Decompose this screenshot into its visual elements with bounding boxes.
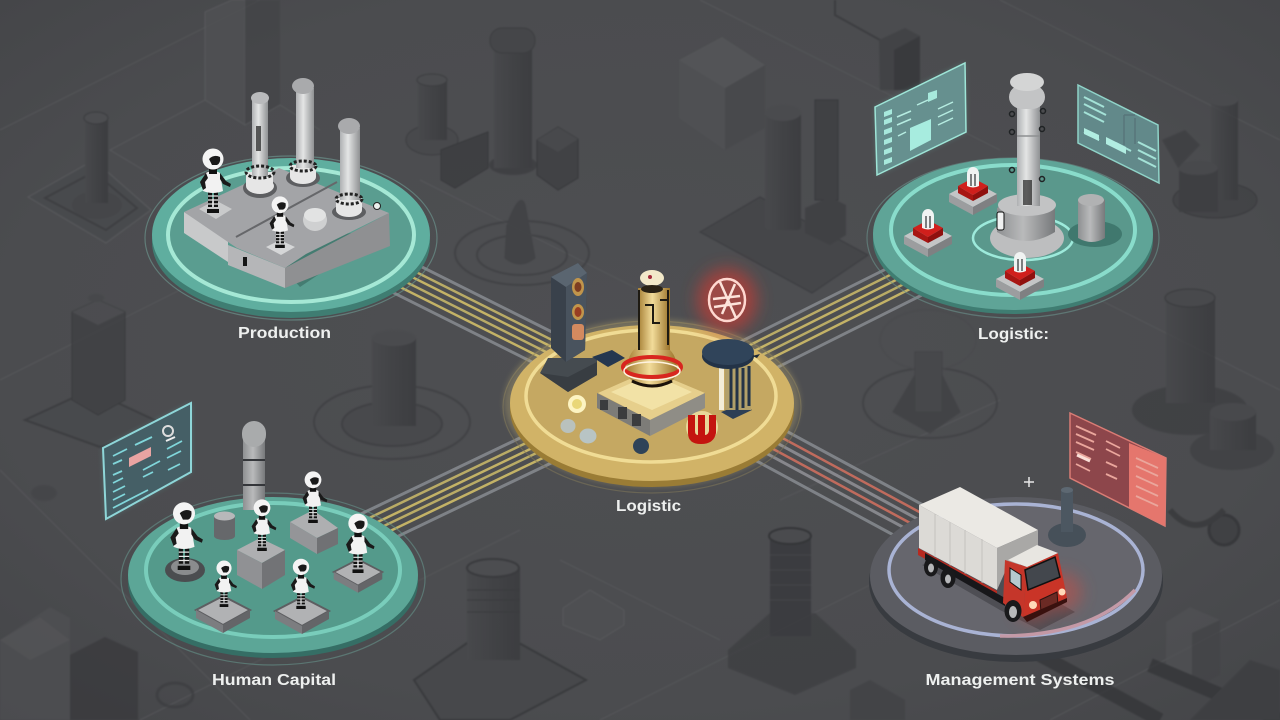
- base block: [184, 168, 390, 288]
- central pillar: [242, 421, 266, 510]
- label: logistic top right: Logistic:: [978, 326, 1049, 343]
- delivery truck: [918, 487, 1082, 630]
- golden tower: [597, 270, 705, 436]
- hub disc: [503, 319, 801, 493]
- connector: centre to management systems: [740, 406, 960, 571]
- platform disc: [867, 158, 1159, 318]
- robot group: [170, 471, 375, 609]
- dark table: [702, 339, 760, 419]
- background cylinder centre-left: [314, 330, 470, 459]
- joystick control: [1048, 487, 1086, 547]
- platform disc: [121, 493, 425, 665]
- label: production: Production: [238, 325, 331, 342]
- label: logistic hub: Logistic: [616, 498, 681, 515]
- right hologram screen: [1078, 85, 1159, 183]
- pillars: [243, 78, 366, 220]
- background machines right middle: [1132, 289, 1274, 545]
- connector: production to centre: [380, 246, 570, 381]
- sparkle: [1024, 477, 1034, 487]
- panel: human capital platform: [103, 403, 425, 665]
- label: human capital: Human Capital: [212, 672, 336, 689]
- background large box top-right-centre: [679, 0, 920, 150]
- panel: management systems platform: [869, 413, 1166, 662]
- panel: logistic top right: [867, 63, 1159, 318]
- signal column: [540, 263, 597, 392]
- background cylinders right: [1162, 94, 1257, 218]
- platform disc: [145, 156, 437, 320]
- robot workers: [199, 148, 295, 255]
- panel: production platform: [145, 78, 437, 320]
- background box tower mid-left: [25, 294, 163, 447]
- panel: logistic hub: [503, 263, 801, 493]
- background towers centre-right: [700, 100, 868, 293]
- background ring machine: [455, 200, 589, 285]
- left hologram screen: [875, 63, 966, 175]
- background machinery bottom right: [850, 607, 1280, 720]
- background box top-left: [110, 0, 320, 180]
- red stations: [904, 167, 1044, 300]
- small spheres: [560, 395, 649, 454]
- hologram screen: [103, 403, 191, 519]
- background cylinder bottom centre: [414, 559, 624, 720]
- red hologram screen: [1070, 413, 1166, 526]
- glowing warning sign: [697, 268, 757, 332]
- label: management systems: Management Systems: [926, 672, 1115, 689]
- red badge: [686, 411, 718, 444]
- plinths and boxes: [165, 510, 382, 634]
- connector: human capital to centre: [340, 414, 570, 564]
- central column: [973, 73, 1073, 260]
- background blocks bottom left: [0, 485, 193, 720]
- dark floor tile: [592, 350, 625, 367]
- background cylinder cluster top centre: [406, 28, 578, 190]
- connector: logistics top-right to centre: [730, 242, 940, 391]
- small grey cylinder: [1068, 194, 1122, 247]
- short cylinder: [214, 512, 235, 540]
- platform disc: [869, 497, 1163, 662]
- background ring machine right: [863, 310, 997, 438]
- background tower left: [28, 112, 151, 243]
- background cylinder bottom right-centre: [728, 528, 856, 695]
